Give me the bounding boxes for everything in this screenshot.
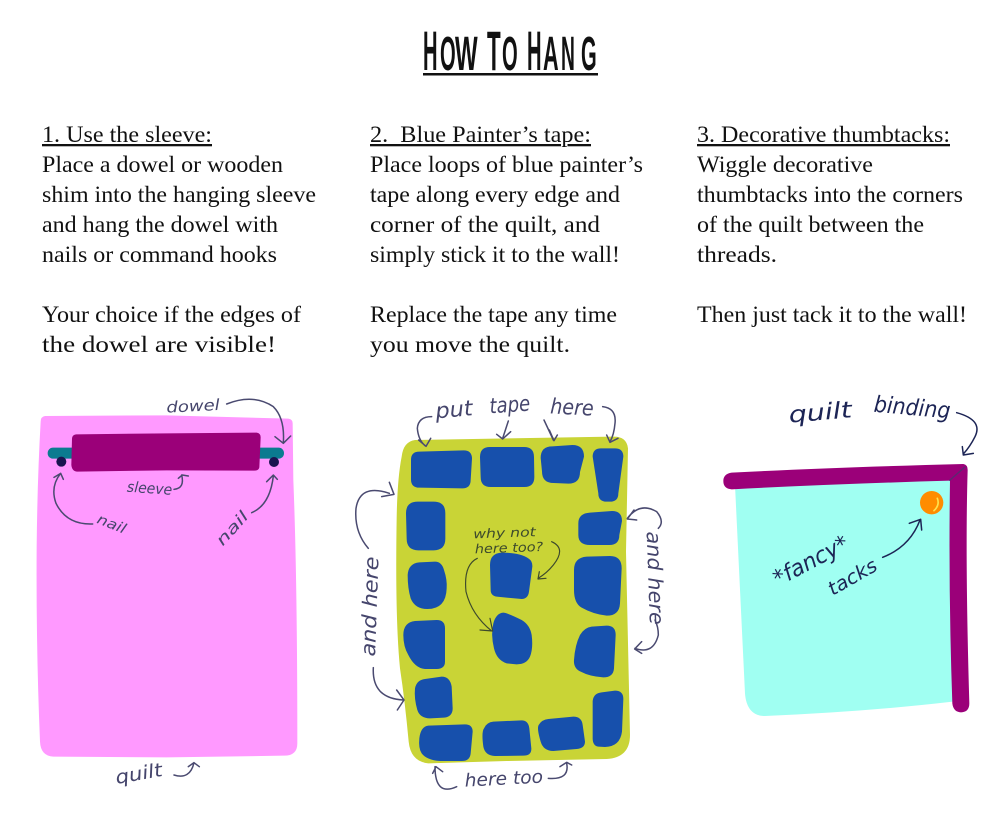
label: quilt binding: [788, 392, 951, 429]
label: right nail: nail: [212, 507, 253, 549]
text block: step 3: Wiggle decorative: [697, 152, 873, 177]
text block: step 3: 3. Decorative thumbtacks:: [697, 122, 950, 147]
text block: step 2: simply stick it to the wall!: [370, 242, 620, 267]
panel: thumbtack illustration: [723, 392, 977, 716]
label: fancy tacks: *fancy*: [769, 531, 853, 592]
text block: step 3: [697, 122, 967, 327]
label: left nail: nail: [95, 512, 128, 538]
dowel: [48, 448, 284, 459]
title: H: [527, 19, 542, 82]
text block: step 1: 1. Use the sleeve:: [42, 122, 212, 147]
arrow: sleeve: [174, 475, 188, 489]
arrow: dowel: [227, 399, 291, 443]
arrow: fancy tacks: [883, 519, 922, 557]
arrow: left nail: [54, 473, 93, 524]
text block: step 2: you move the quilt.: [370, 332, 570, 357]
quilt: [37, 415, 297, 757]
text block: step 3: of the quilt between the: [697, 212, 924, 237]
sleeve: [71, 433, 261, 472]
quilt: [396, 437, 630, 763]
label: quilt binding: quilt: [788, 397, 854, 429]
text block: step 1: [42, 122, 316, 357]
arrows: bottom: [433, 762, 572, 789]
binding: [723, 464, 969, 712]
text block: step 2: corner of the quilt, and: [370, 212, 601, 237]
text block: step 1: shim into the hanging sleeve: [42, 182, 316, 207]
title: A: [543, 26, 559, 80]
text block: step 3: threads.: [697, 242, 777, 267]
nail left: [56, 457, 66, 467]
title: T: [487, 20, 501, 83]
title: H: [423, 19, 438, 82]
arrows: right side: [627, 508, 661, 653]
label: sleeve: sleeve: [126, 479, 173, 499]
thumbtack: [920, 491, 943, 514]
label: here too: here too: [464, 767, 543, 792]
label: put tape here: tape: [489, 392, 531, 419]
label: quilt: quilt: [114, 760, 165, 789]
label: put tape here: here: [550, 394, 594, 422]
arrow: quilt: [174, 763, 199, 776]
text block: step 3: thumbtacks into the corners: [697, 182, 963, 207]
text block: step 1: the dowel are visible!: [42, 332, 276, 357]
text block: step 1: Your choice if the edges of: [42, 302, 301, 327]
tape loops: [403, 445, 623, 761]
arrows: left side: [356, 482, 404, 710]
title: N: [561, 27, 575, 81]
text block: step 1: Place a dowel or wooden: [42, 152, 284, 177]
text block: step 2: [370, 122, 643, 357]
quilt: [735, 478, 953, 716]
binding mitre: [949, 467, 965, 481]
arrow: binding: [957, 413, 977, 455]
text block: step 1: nails or command hooks: [42, 242, 277, 267]
label: fancy tacks: tacks: [824, 554, 881, 600]
text block: step 2: Replace the tape any time: [370, 302, 617, 327]
text block: step 3: Then just tack it to the wall!: [697, 302, 967, 327]
panel: sleeve illustration: [37, 396, 297, 789]
text block: step 2: Place loops of blue painter’s: [370, 152, 643, 177]
text block: step 2: tape along every edge and: [370, 182, 621, 207]
arrow: right nail: [252, 475, 277, 513]
title: G: [581, 27, 597, 80]
title: O: [502, 27, 518, 80]
label: why not here too?: [473, 524, 544, 556]
label: dowel: dowel: [166, 396, 221, 417]
text block: step 2: 2. Blue Painter’s tape:: [370, 122, 591, 147]
text block: step 1: and hang the dowel with: [42, 212, 279, 237]
title: W: [455, 28, 478, 81]
label: put tape here: put: [433, 396, 475, 424]
label: quilt binding: binding: [873, 392, 951, 424]
label: put tape here: [433, 392, 594, 424]
label: why not here too?: here too?: [475, 539, 544, 556]
title: [423, 19, 598, 83]
arrows: centre: [466, 542, 560, 631]
arrows: top: [417, 407, 618, 446]
label: and here, left: and here: [356, 556, 383, 657]
label: and here, right: and here: [642, 531, 669, 625]
panel: painter's tape illustration: [356, 392, 669, 792]
label: fancy tacks: [769, 531, 881, 600]
label: why not here too?: why not: [473, 524, 537, 541]
title: O: [440, 27, 456, 80]
nail right: [269, 457, 279, 467]
